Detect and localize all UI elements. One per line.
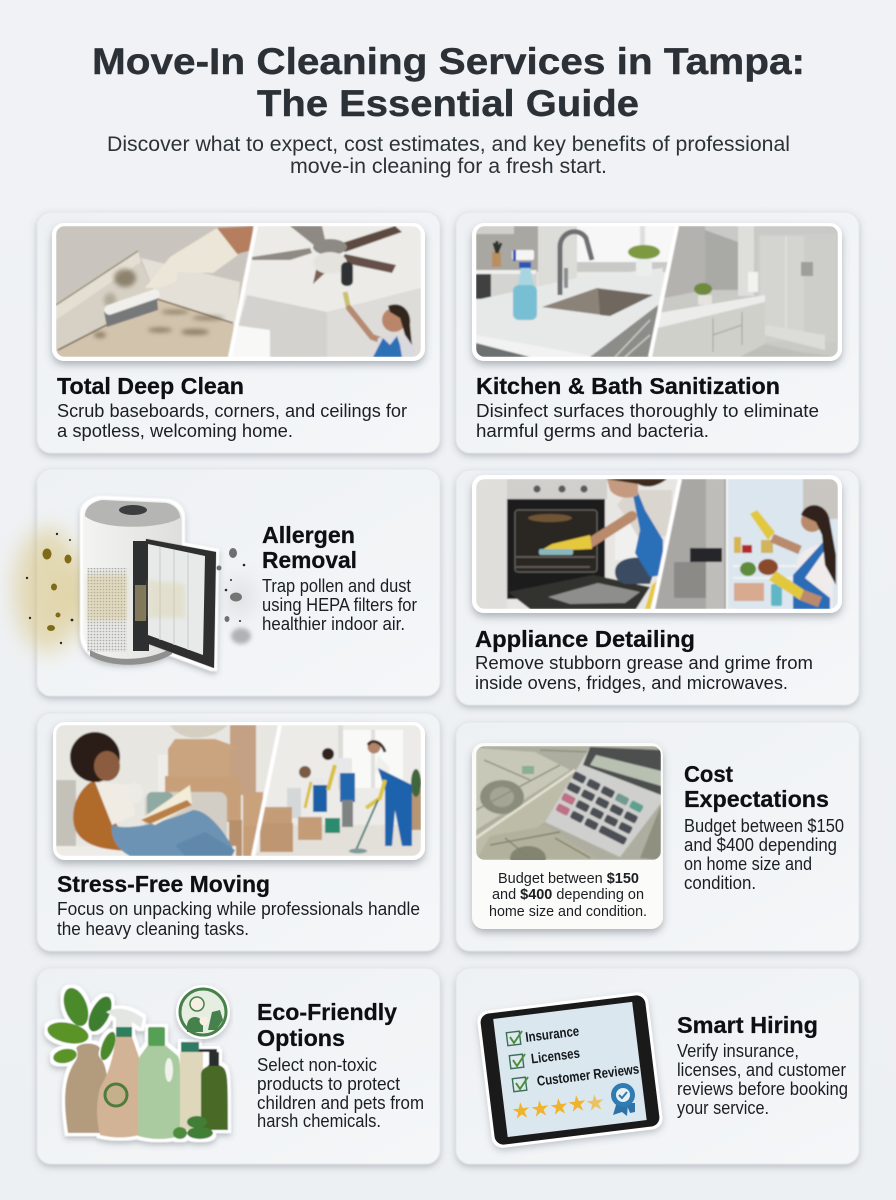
description (257, 1055, 424, 1131)
panel: kitchen and bath sanitization (456, 212, 859, 453)
subtitle: move-in cleaning for a fresh start. (290, 155, 607, 178)
star rating: ★ (584, 1090, 607, 1117)
checklist: Insurance (524, 1022, 580, 1045)
description (684, 816, 844, 893)
photo card: cash and calculator (472, 743, 663, 929)
description (476, 401, 819, 441)
award badge (611, 1083, 635, 1116)
panel: eco-friendly options (37, 968, 440, 1164)
description: the heavy cleaning tasks. (57, 919, 249, 939)
heading: Total Deep Clean (57, 373, 244, 399)
heading: Appliance Detailing (475, 626, 695, 652)
description: a spotless, welcoming home. (57, 421, 293, 441)
title: Move-In Cleaning Services in Tampa: (92, 41, 805, 82)
icon: air purifier with HEPA filter (83, 499, 216, 668)
photo: scrubbing baseboard and dusting ceiling fan (52, 223, 425, 361)
description: on home size and (684, 854, 812, 874)
description (475, 653, 813, 693)
description: harsh chemicals. (257, 1111, 381, 1131)
description: children and pets from (257, 1093, 424, 1113)
panel: stress-free moving (37, 713, 440, 951)
star rating: ★ (529, 1096, 552, 1123)
description: Scrub baseboards, corners, and ceilings for (57, 401, 407, 421)
description: licenses, and customer (677, 1060, 846, 1080)
heading: Options (257, 1025, 345, 1051)
photo: kitchen sink and bathroom vanity (472, 223, 842, 361)
star rating: ★ (510, 1098, 533, 1125)
description: using HEPA filters for (262, 595, 417, 615)
heading: Allergen (262, 522, 355, 548)
heading: Smart Hiring (677, 1012, 818, 1038)
heading: Stress-Free Moving (57, 871, 270, 897)
description: Remove stubborn grease and grime from (475, 653, 813, 673)
caption (489, 871, 647, 920)
description: products to protect (257, 1074, 400, 1094)
heading: Removal (262, 547, 357, 573)
icon: eco-friendly bottles and leaves (45, 984, 230, 1139)
heading (262, 522, 357, 573)
panel: total deep clean (37, 212, 440, 453)
checklist: Licenses (530, 1045, 581, 1066)
subtitle (107, 133, 790, 178)
checklist: Customer Reviews (536, 1060, 640, 1089)
description: harmful germs and bacteria. (476, 421, 709, 441)
description: reviews before booking (677, 1079, 848, 1099)
title (92, 41, 805, 124)
caption: and $400 depending on (492, 887, 644, 903)
description: Focus on unpacking while professionals handle (57, 899, 420, 919)
photo: relaxing with book and cleaning crew (53, 722, 425, 860)
caption: Budget between $150 (498, 871, 639, 887)
description: Verify insurance, (677, 1041, 799, 1061)
panel: cost expectations (456, 722, 859, 951)
subtitle: Discover what to expect, cost estimates, and key benefits of professional (107, 133, 790, 156)
star rating: ★ (566, 1091, 589, 1118)
dust particles (216, 548, 254, 644)
panel: smart hiring (456, 968, 859, 1164)
description: and $400 depending (684, 835, 837, 855)
description: Select non-toxic (257, 1055, 377, 1075)
caption: home size and condition. (489, 904, 647, 920)
heading: Kitchen & Bath Sanitization (476, 373, 780, 399)
star rating (510, 1090, 607, 1125)
description: inside ovens, fridges, and microwaves. (475, 673, 788, 693)
description (57, 899, 420, 939)
heading: Eco-Friendly (257, 999, 397, 1025)
heading (257, 999, 397, 1051)
panel: appliance detailing (456, 470, 859, 705)
heading: Cost (684, 761, 733, 787)
description: your service. (677, 1098, 769, 1118)
pollen haze (14, 528, 106, 652)
star rating: ★ (548, 1094, 571, 1121)
description: condition. (684, 873, 756, 893)
description: Trap pollen and dust (262, 576, 411, 596)
checklist (524, 1016, 640, 1090)
description (262, 576, 417, 634)
panel: allergen removal (14, 469, 440, 696)
title: The Essential Guide (257, 83, 639, 124)
heading: Expectations (684, 786, 829, 812)
photo: cleaning oven and fridge (472, 475, 842, 613)
description: healthier indoor air. (262, 614, 405, 634)
description: Disinfect surfaces thoroughly to eliminate (476, 401, 819, 421)
description (57, 401, 407, 441)
icon: tablet checklist (476, 991, 664, 1149)
check boxes (506, 1031, 528, 1092)
heading (684, 761, 829, 812)
description: Budget between $150 (684, 816, 844, 836)
description (677, 1041, 848, 1118)
